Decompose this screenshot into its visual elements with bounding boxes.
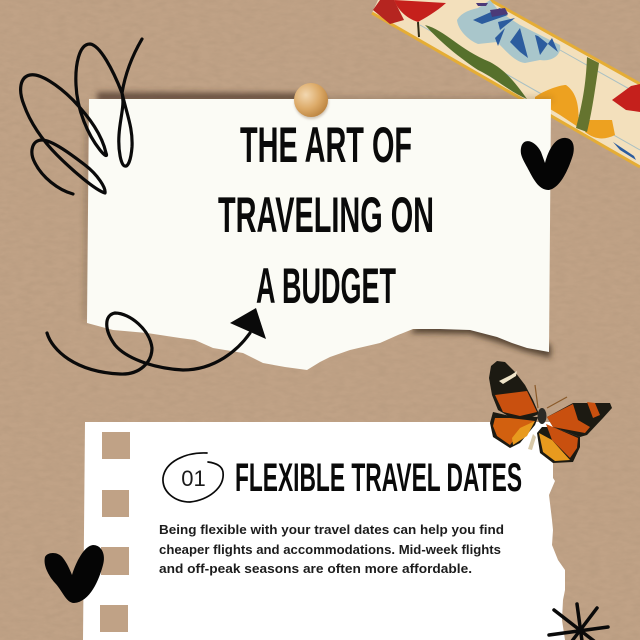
icon: heart top right [521, 138, 574, 190]
title: TRAVELING ON [218, 187, 434, 243]
title: A BUDGET [256, 258, 396, 314]
body paragraph [159, 522, 504, 576]
title [218, 117, 434, 314]
icon: heart bottom left [45, 545, 104, 603]
body paragraph: cheaper flights and accommodations. Mid-week flights [159, 542, 501, 557]
body paragraph: Being flexible with your travel dates can help you find [159, 522, 504, 537]
note paper shadow [84, 92, 552, 358]
title: THE ART OF [240, 117, 412, 173]
icon: butterfly [489, 361, 612, 463]
body paragraph: and off-peak seasons are often more affordable. [159, 561, 472, 576]
number badge: 01: 01 [181, 466, 206, 491]
torn title note paper [87, 99, 551, 370]
icon: asterisk doodle [549, 604, 608, 640]
number badge: 01 [163, 453, 223, 502]
icon: gold push pin [294, 83, 328, 119]
washi tape with flowers [372, 0, 640, 167]
icon: looped arrow [47, 308, 266, 374]
icon: scribble loops [21, 39, 142, 194]
paper punch holes [100, 432, 130, 632]
second torn note paper [83, 422, 565, 640]
